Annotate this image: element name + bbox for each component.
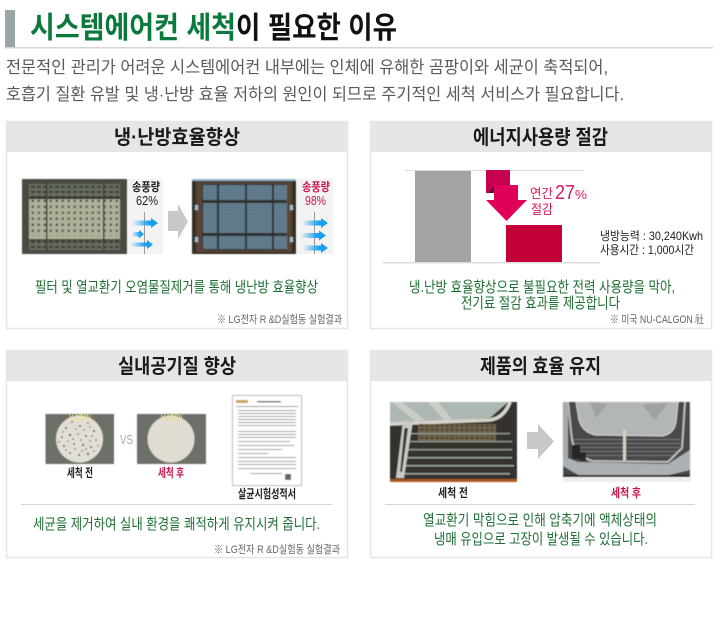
KATRI mark: KATRI (160, 413, 182, 423)
intro text: 전문적인 관리가 어려운 시스템에어컨 내부에는 인체에 유해한 곰팡이와 세균이 축적되어, (6, 58, 608, 77)
after label: 세척 후 (158, 465, 184, 480)
caption: 세균을 제거하여 실내 환경을 쾌적하게 유지시켜 줍니다. (33, 516, 320, 533)
title: 이 필요한 이유 (236, 12, 397, 45)
airflow 62 percent: 62% (136, 193, 158, 208)
panel heading (370, 121, 712, 152)
before label: 세척 전 (67, 465, 93, 480)
arrow (527, 424, 554, 459)
photo: dirty filter (22, 179, 127, 254)
photo: coil before cleaning (390, 402, 517, 482)
airflow 62 percent: 송풍량 (132, 180, 160, 194)
airflow 62 percent (128, 179, 163, 254)
VS label: VS (120, 432, 133, 447)
photo: culture after cleaning (137, 414, 206, 464)
caption: 냉매 유입으로 고장이 발생될 수 있습니다. (434, 531, 648, 548)
intro text (6, 58, 624, 104)
test conditions: 사용시간 : 1,000시간 (600, 243, 694, 257)
test conditions: 냉방능력 : 30,240Kwh (600, 229, 703, 243)
photo: coil after cleaning (562, 402, 691, 482)
title (5, 10, 713, 48)
panel: cooling and heating efficiency (6, 121, 348, 328)
panel: indoor air quality (6, 350, 348, 558)
caption: 전기료 절감 효과를 제공합니다 (461, 295, 620, 312)
panel: energy savings (370, 121, 712, 328)
panel heading (6, 121, 348, 152)
savings label: 연간 (530, 186, 553, 201)
panel heading: 실내공기질 향상 (118, 355, 236, 378)
savings label: 절감 (531, 202, 553, 217)
KATRI mark: KATRI (69, 413, 91, 423)
icon: down arrow (486, 170, 527, 221)
title: 시스템에어컨 세척 (30, 12, 236, 45)
source note: ※ LG전자 R &D실험동 실험결과 (217, 313, 342, 326)
arrow (168, 204, 188, 239)
savings label (530, 182, 587, 217)
panel heading: 제품의 효율 유지 (480, 355, 601, 378)
caption: 열교환기 막힘으로 인해 압축기에 액체상태의 (423, 512, 657, 529)
before label: 세척 전 (438, 485, 468, 500)
caption: 냉.난방 효율향상으로 불필요한 전력 사용량을 막아, (409, 279, 675, 296)
test conditions (600, 229, 703, 257)
certificate label: 살균시험성적서 (238, 486, 296, 501)
panel: product efficiency (370, 350, 712, 558)
source note: ※ LG전자 R &D실험동 실험결과 (214, 543, 340, 556)
photo: culture before cleaning (46, 414, 114, 464)
panel heading (6, 350, 348, 381)
savings label: 27 (555, 182, 575, 204)
caption: 필터 및 열교환기 오염물질제거를 통해 냉난방 효율향상 (35, 279, 318, 296)
caption (409, 279, 675, 312)
panel heading: 냉·난방효율향상 (114, 126, 240, 149)
savings label: % (575, 187, 587, 202)
airflow 98 percent: 송풍량 (302, 180, 330, 194)
intro text: 호흡기 질환 유발 및 냉·난방 효율 저하의 원인이 되므로 주기적인 세척 서비스가 필요합니다. (6, 85, 624, 104)
certificate document (232, 396, 302, 486)
after label: 세척 후 (611, 485, 641, 500)
panel heading: 에너지사용량 절감 (473, 126, 608, 149)
bar chart (383, 170, 600, 264)
panel heading (370, 350, 712, 381)
airflow 98 percent (297, 179, 333, 254)
photo: clean filter (192, 179, 296, 254)
caption (423, 512, 657, 548)
airflow 98 percent: 98% (305, 193, 326, 208)
